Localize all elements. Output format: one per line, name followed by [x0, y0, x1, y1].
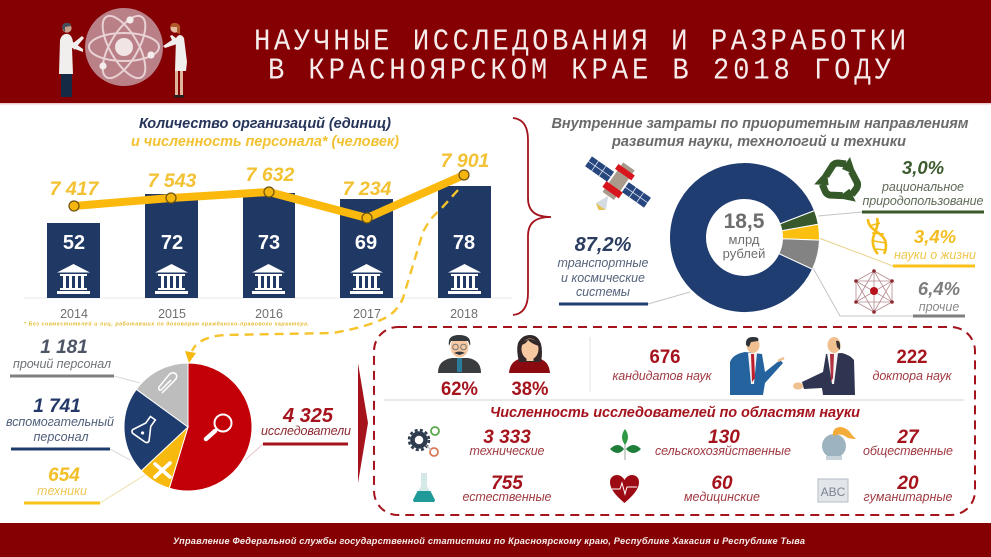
stat: natural: 755 [491, 473, 523, 494]
label: other: 6,4% [918, 278, 960, 299]
subheading: Численность исследователей по областям науки [490, 405, 860, 421]
stat: technical [470, 427, 545, 458]
icon: atom globe [85, 8, 163, 86]
donut centre total: 18,5 [724, 210, 765, 233]
stat: social [863, 427, 953, 458]
stat: doctors [872, 347, 953, 383]
stat: humanities [864, 473, 953, 504]
icon: network [854, 269, 894, 314]
icon: book [818, 479, 848, 502]
stat: doctors: 222 [896, 347, 928, 368]
label: support personnel: вспомогательный [6, 415, 114, 429]
label: other personnel [10, 337, 114, 378]
icon: book: ABC [821, 485, 846, 499]
stat: agricultural: сельскохозяйственные [655, 444, 791, 458]
donut chart [670, 163, 820, 313]
bar chart: 69 [355, 232, 377, 254]
bar chart: 2018 [450, 307, 478, 321]
stat: social: 27 [896, 427, 920, 448]
footer [0, 523, 991, 557]
title: НАУЧНЫЕ ИССЛЕДОВАНИЯ И РАЗРАБОТКИ [254, 24, 906, 59]
label: technicians: 654 [48, 465, 80, 486]
stat: medical: 60 [711, 473, 733, 494]
label: other [913, 278, 965, 318]
label: other personnel: прочий персонал [13, 357, 111, 371]
icon: man [438, 335, 481, 373]
dashed frame [374, 327, 975, 515]
icon: sprout [610, 429, 641, 460]
icon: gears [409, 427, 439, 456]
label: researchers [261, 405, 351, 446]
brace connector [513, 118, 551, 315]
label: technicians [24, 465, 100, 504]
label: other personnel: 1 181 [40, 337, 88, 358]
line chart: 7 417 [50, 178, 100, 200]
label: support personnel [6, 396, 114, 450]
label: technicians: техники [37, 484, 87, 498]
line chart: 7 632 [246, 164, 295, 186]
icon: paperclip [159, 373, 177, 393]
label: life sciences: науки о жизни [894, 248, 976, 262]
stat: technical: 3 333 [483, 427, 531, 448]
line chart: 7 543 [148, 170, 197, 192]
leader lines [648, 212, 913, 316]
footer: Управление Федеральной службы государственной статистики по Красноярскому краю, Республике Хакасия и Республике Тыва [173, 536, 805, 546]
icon: magnifier [206, 414, 232, 439]
expenditure heading [552, 116, 969, 150]
donut centre total: млрд [728, 232, 760, 247]
label: nature management: природопользование [862, 194, 984, 208]
chart heading: Количество организаций (единиц) [139, 116, 391, 132]
label: nature management [862, 157, 984, 214]
bar chart: 2014 [60, 307, 88, 321]
label: transport and space: системы [576, 285, 630, 299]
line chart: 7 901 [441, 150, 489, 172]
label: other: прочие [919, 300, 959, 314]
icon: businessmen [730, 337, 855, 395]
label: transport and space [558, 234, 649, 306]
label: transport and space: транспортные [558, 256, 649, 270]
stat: agricultural [655, 427, 791, 458]
expenditure heading: развития науки, технологий и техники [611, 134, 906, 150]
icon: head bust [822, 427, 856, 460]
title: В КРАСНОЯРСКОМ КРАЕ В 2018 ГОДУ [268, 53, 891, 88]
leader lines [100, 376, 263, 503]
arrow to researchers panel [358, 363, 368, 483]
header band [0, 0, 991, 104]
label: support personnel: персонал [34, 430, 88, 444]
stat: natural: естественные [462, 490, 552, 504]
chart heading [131, 116, 399, 150]
stat: candidates: кандидатов наук [612, 369, 713, 383]
stat: technical: технические [470, 444, 545, 458]
bar chart: 73 [258, 232, 280, 254]
pie chart [124, 363, 252, 491]
icon: flask [131, 412, 161, 444]
stat: candidates: 676 [650, 347, 680, 368]
bar chart [24, 186, 512, 321]
icon: woman [509, 335, 550, 373]
label: life sciences: 3,4% [914, 226, 956, 247]
dashed connector arrow [185, 190, 458, 363]
label: researchers: исследователи [261, 424, 351, 438]
donut centre total [723, 210, 765, 261]
stat: gender share: 38% [512, 379, 549, 400]
donut centre total: рублей [723, 246, 765, 261]
stat: gender share: 62% [441, 379, 478, 400]
bar chart: 2015 [158, 307, 186, 321]
stat: humanities: 20 [896, 473, 919, 494]
icon: heart [610, 475, 639, 503]
panel: internal expenditure [552, 116, 984, 318]
footnote: * Без совместителей и лиц, работавших по договорам гражданско-правового характера. [24, 320, 309, 328]
panel: personnel pie [6, 337, 351, 504]
icon: satellite [569, 146, 658, 230]
stat: doctors: доктора наук [872, 369, 953, 383]
stat: humanities: гуманитарные [864, 490, 953, 504]
icon: recycle [811, 157, 868, 207]
line chart: 7 234 [343, 178, 392, 200]
stat: agricultural: 130 [708, 427, 740, 448]
stat: candidates [612, 347, 713, 383]
icon: scientist right [163, 23, 187, 97]
label: nature management: рациональное [881, 180, 964, 194]
icon: dna [868, 218, 886, 254]
stat: medical [684, 473, 760, 504]
stat: social: общественные [863, 444, 953, 458]
stat: medical: медицинские [684, 490, 760, 504]
label: researchers: 4 325 [282, 405, 334, 427]
stat: natural [462, 473, 552, 504]
line chart [50, 150, 489, 223]
label: nature management: 3,0% [902, 157, 944, 178]
bar chart: 2016 [255, 307, 283, 321]
title [254, 24, 906, 88]
stat: gender share [441, 379, 549, 400]
icon: tools [155, 463, 170, 477]
label: life sciences [893, 226, 976, 268]
icon: flask [413, 473, 435, 502]
bar chart: 72 [161, 232, 183, 254]
chart heading: и численность персонала* (человек) [131, 134, 399, 150]
panel: organisations and personnel chart [24, 116, 512, 363]
label: support personnel: 1 741 [33, 396, 81, 417]
bar chart: 52 [63, 232, 85, 254]
expenditure heading: Внутренние затраты по приоритетным направлениям [552, 116, 969, 132]
bar chart: 2017 [353, 307, 381, 321]
label: transport and space: и космические [561, 271, 645, 285]
panel: researchers detail [374, 327, 975, 515]
icon: scientist left [59, 23, 84, 97]
label: transport and space: 87,2% [575, 234, 632, 256]
bar chart: 78 [453, 232, 475, 254]
